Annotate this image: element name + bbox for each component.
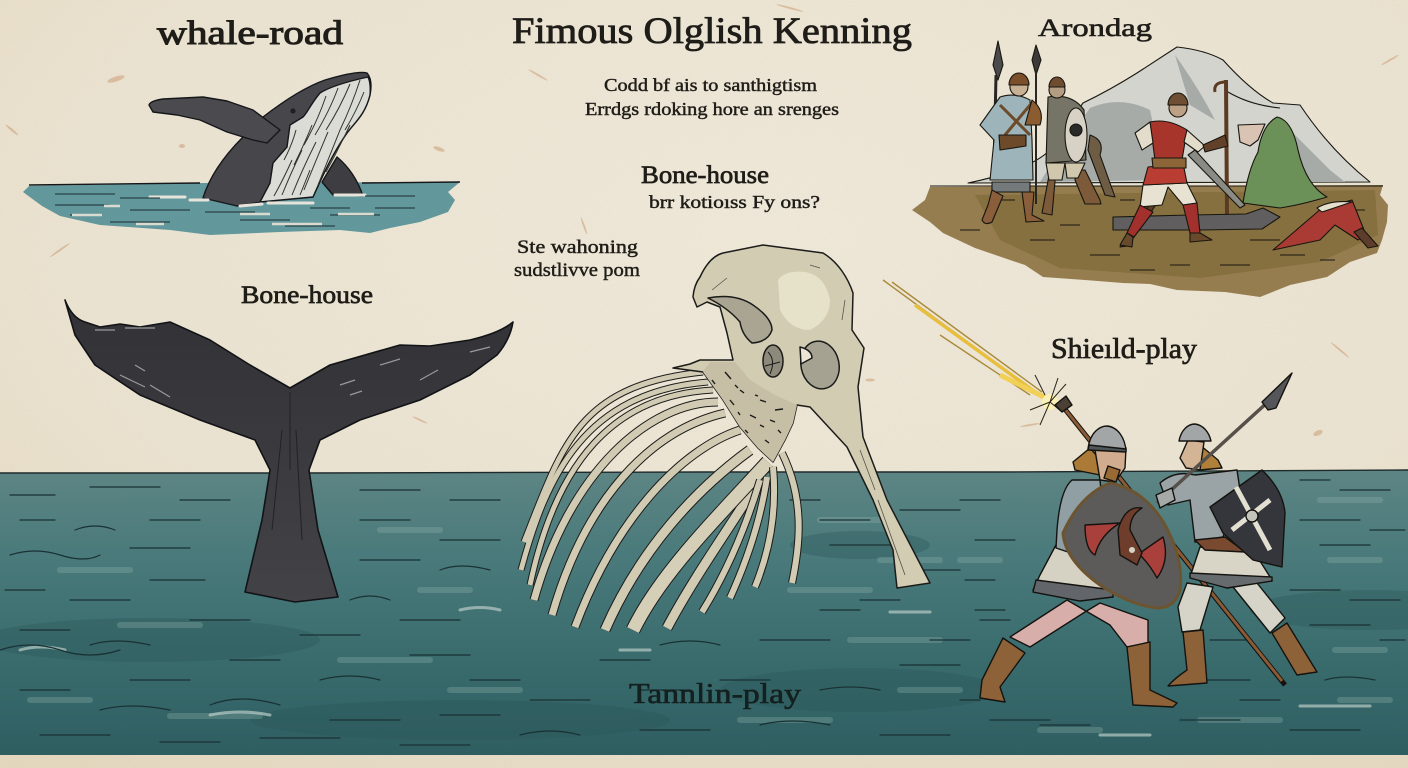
dark wave lines [0, 480, 1405, 745]
side text: sudstlivve pom [514, 260, 640, 281]
heading: bone-house centre: brr kotioıss Fy ons? [649, 192, 820, 212]
illustration: spark and streak [883, 280, 1066, 425]
fallen warrior [1273, 200, 1378, 250]
mountain [968, 47, 1370, 183]
heading: tannlin-play: Tannlin-play [629, 679, 801, 710]
belly [260, 77, 370, 202]
side text: Ste wahoning [517, 237, 639, 258]
crumbled vertebra [703, 362, 797, 462]
right fighter shield [1210, 470, 1285, 567]
ground [912, 185, 1388, 297]
water puddle [23, 182, 460, 235]
intro text: Codd bf ais to santhigtism [604, 75, 817, 95]
intro text [585, 75, 839, 119]
back fin [322, 157, 363, 196]
warrior: grey [1032, 45, 1115, 215]
nasal cavity [763, 345, 783, 377]
warrior: blue [980, 41, 1044, 224]
heading: shield-play: Shieıld-play [1051, 334, 1197, 365]
cloak figure [1243, 117, 1327, 208]
left eye socket [708, 297, 772, 343]
foam [150, 195, 365, 206]
intro text: Errdgs rdoking hore an srenges [585, 99, 839, 119]
right eye socket [796, 338, 844, 392]
heading: bone-house centre [641, 162, 820, 212]
light wave streaks [30, 500, 1390, 730]
left fighter [980, 426, 1181, 707]
illustration: rib cage [521, 372, 799, 630]
heading: bone-house centre: Bone-house [641, 162, 769, 189]
warrior: red [1120, 93, 1245, 247]
heading: bone-house left: Bone-house [241, 282, 373, 309]
side text [514, 237, 640, 281]
illustration: breaching whale [23, 72, 460, 235]
right fighter [1156, 373, 1317, 686]
illustration: fighters [980, 373, 1317, 707]
fallen figure log [1113, 208, 1280, 230]
body [203, 72, 371, 206]
pectoral fin [149, 97, 280, 143]
skull light patch [778, 272, 830, 330]
spear crossing [1060, 403, 1285, 685]
staff [1226, 80, 1227, 215]
darker sea swells [0, 531, 1408, 740]
illustration: battle scene [912, 41, 1388, 297]
heading: arondag: Arondag [1038, 15, 1153, 42]
illustration: whale fluke [65, 300, 513, 602]
title: Fimous Olglish Kenning [512, 11, 912, 52]
right spear [1157, 400, 1270, 503]
heading: whale-road: whale-road [157, 15, 343, 52]
illustration: bone skull [673, 245, 930, 588]
left fighter shield [1063, 483, 1181, 608]
main sea [0, 470, 1408, 755]
